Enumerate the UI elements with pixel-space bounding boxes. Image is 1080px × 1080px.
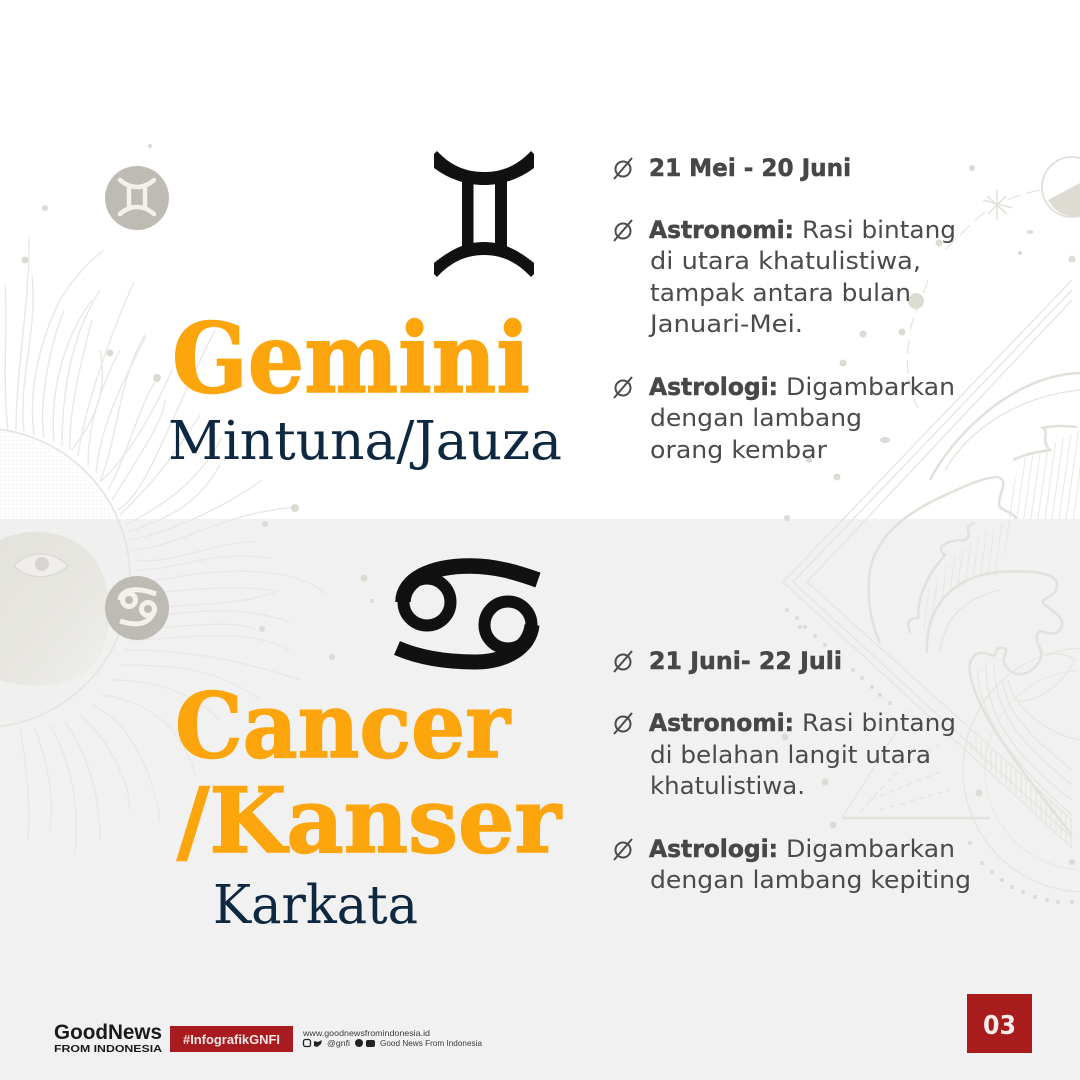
heading: /Kanser: /Kanser xyxy=(177,768,563,874)
text block: Cancer facts xyxy=(614,647,971,894)
subheading: Karkata: Karkata xyxy=(213,875,418,936)
hashtag tag xyxy=(170,1026,293,1052)
contact details: @gnfi xyxy=(327,1038,350,1048)
decoration: scattered star dots xyxy=(22,144,1076,904)
text block: Gemini facts: Digambarkan xyxy=(786,373,955,401)
bullet xyxy=(614,713,632,734)
text block: Gemini facts: di utara khatulistiwa, xyxy=(650,247,921,275)
logo: GoodNews From Indonesia xyxy=(54,1021,162,1055)
logo: GoodNews From Indonesia: FROM INDONESIA xyxy=(54,1044,162,1055)
bullet xyxy=(614,377,632,398)
text block: Cancer facts: 21 Juni- 22 Juli xyxy=(649,647,842,675)
bullet xyxy=(614,651,632,672)
text block: Cancer facts: Astrologi: xyxy=(649,835,778,863)
bullet xyxy=(614,158,632,179)
text block: Gemini facts: 21 Mei - 20 Juni xyxy=(649,154,851,182)
footer xyxy=(54,994,1032,1055)
subheading: Mintuna/Jauza: Mintuna/Jauza xyxy=(168,411,562,472)
panel: Gemini xyxy=(105,151,956,472)
icon: small Cancer badge xyxy=(105,576,169,640)
hashtag tag: #InfografikGNFI xyxy=(183,1033,280,1047)
bullet xyxy=(614,220,632,241)
text block: Gemini facts: Astronomi: xyxy=(649,216,794,244)
icon: small Gemini badge xyxy=(105,166,169,230)
text block: Cancer facts: khatulistiwa. xyxy=(650,772,805,800)
text block: Cancer facts: dengan lambang kepiting xyxy=(650,866,971,894)
bullet xyxy=(614,839,632,860)
panel: Cancer xyxy=(105,566,971,936)
logo: GoodNews From Indonesia: GoodNews xyxy=(54,1021,162,1044)
background: grey lower panel xyxy=(0,519,1080,1080)
icon: large Gemini symbol xyxy=(434,151,534,277)
text block: Gemini facts: dengan lambang xyxy=(650,404,862,432)
heading: Cancer: Cancer xyxy=(175,673,511,779)
contact details: Good News From Indonesia xyxy=(380,1038,482,1048)
heading: Gemini: Gemini xyxy=(172,302,530,415)
text block: Cancer facts: Digambarkan xyxy=(786,835,955,863)
text block: Gemini facts: Januari-Mei. xyxy=(648,310,803,338)
text block: Gemini facts: Rasi bintang xyxy=(802,216,956,244)
text block: Cancer facts: di belahan langit utara xyxy=(650,741,931,769)
decoration: engraved sun with rays xyxy=(0,237,327,855)
contact details xyxy=(302,1028,482,1048)
page number: 03 xyxy=(983,1011,1016,1041)
contact details: www.goodnewsfromindonesia.id xyxy=(302,1028,430,1038)
text block: Gemini facts: orang kembar xyxy=(650,436,827,464)
page number xyxy=(967,994,1032,1053)
text block: Gemini facts xyxy=(614,154,956,464)
background: white upper panel xyxy=(0,0,1080,519)
decoration: diamond frame, waves and moon xyxy=(783,157,1080,892)
text block: Gemini facts: tampak antara bulan xyxy=(650,279,911,307)
text block: Cancer facts: Rasi bintang xyxy=(802,709,956,737)
text block: Gemini facts: Astrologi: xyxy=(649,373,778,401)
text block: Cancer facts: Astronomi: xyxy=(649,709,794,737)
icon: large Cancer symbol xyxy=(397,566,538,662)
